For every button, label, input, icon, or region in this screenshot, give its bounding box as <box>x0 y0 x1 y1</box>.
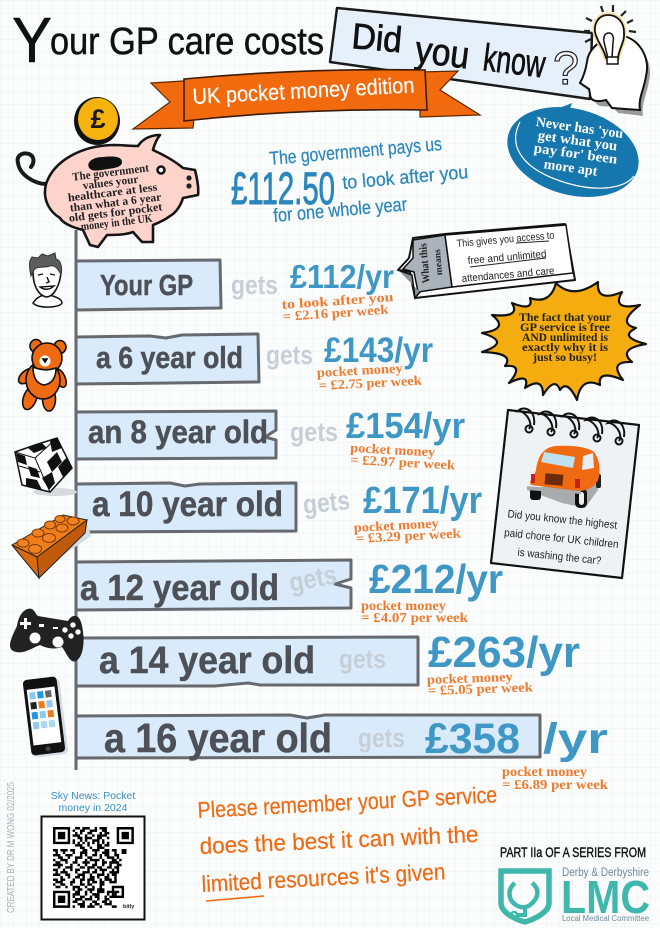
icon: pound coin: £ <box>90 104 106 134</box>
row: Your GP: = £2.16 per week <box>282 302 389 324</box>
row: a 14 year old: = £5.05 per week <box>428 679 534 698</box>
text: government pays us: £112.50 <box>231 163 335 214</box>
callout: starburst: GP service is free <box>520 320 611 334</box>
icon: piggy bank: values your <box>82 174 139 192</box>
row: an 8 year old: pocket money <box>350 440 436 459</box>
callout: starburst: just so busy! <box>532 350 597 364</box>
row: a 12 year old <box>76 556 503 625</box>
logo: Derby and Derbyshire LMC <box>501 867 650 923</box>
row: an 8 year old: = £2.97 per week <box>350 452 456 473</box>
row: a 6 year old: pocket money <box>316 361 403 380</box>
row: a 6 year old: gets <box>266 340 313 370</box>
panel: did you know banner: ? <box>553 42 579 94</box>
row: a 14 year old: a 14 year old <box>99 640 315 682</box>
callout: speech bubble: get what you <box>537 129 618 155</box>
row: a 14 year old: £263/yr <box>428 628 580 677</box>
row: a 14 year old: pocket money <box>427 669 513 687</box>
callout: what this means note: means <box>433 248 445 276</box>
banner: UK pocket money edition <box>133 70 480 129</box>
row: a 16 year old: = £6.89 per week <box>502 777 609 792</box>
row: a 12 year old: a 12 year old <box>80 567 279 608</box>
icon: head with light bulb <box>580 5 650 116</box>
callout: starburst: exactly why it is <box>522 340 608 354</box>
row: a 16 year old <box>76 715 609 792</box>
panel: did you know banner: Did <box>350 15 404 60</box>
callout: speech bubble <box>497 93 649 211</box>
panel: did you know banner: you <box>413 29 472 78</box>
row: a 16 year old: gets <box>358 723 405 753</box>
callout: what this means note: What this <box>417 242 433 284</box>
callout: what this means note: free and unlimited <box>467 248 547 267</box>
row: a 6 year old: a 6 year old <box>96 340 243 375</box>
text: closing message <box>197 781 498 901</box>
banner: UK pocket money edition: UK pocket money edition <box>192 72 415 109</box>
row: Your GP: gets <box>231 270 278 300</box>
title: Y <box>12 4 52 76</box>
panel: notepad with car: paid chore for UK children <box>504 527 619 551</box>
text: government pays us: to look after you <box>342 162 469 194</box>
panel: did you know banner: know <box>481 37 548 87</box>
row: an 8 year old <box>76 405 465 473</box>
QR caption: Sky News: Pocket <box>51 790 135 802</box>
callout: starburst <box>482 282 646 400</box>
QR caption: money in 2024 <box>59 802 128 814</box>
icon: piggy bank: old gets for pocket <box>68 201 163 225</box>
row: a 12 year old: gets <box>286 559 339 598</box>
icon: piggy bank: money in the UK <box>80 213 153 233</box>
row: a 10 year old: gets <box>301 485 351 520</box>
icon: pound coin <box>74 97 120 145</box>
callout: speech bubble: pay for' been <box>533 141 618 168</box>
logo: Derby and Derbyshire LMC: LMC <box>561 871 650 923</box>
icon: shield and stethoscope <box>501 871 549 922</box>
icon: lego brick <box>12 515 91 578</box>
callout: starburst: AND unlimited is <box>522 330 608 344</box>
row: Your GP: £112/yr <box>290 258 394 295</box>
row: a 16 year old: a 16 year old <box>104 715 332 761</box>
title: our GP care costs <box>50 21 324 63</box>
row: a 10 year old: pocket money <box>353 516 439 535</box>
panel: notepad with car <box>491 409 639 578</box>
icon: orange car <box>527 446 601 508</box>
row: an 8 year old: £154/yr <box>346 405 465 446</box>
icon: teddy bear <box>16 340 69 411</box>
icon: piggy bank <box>18 135 198 247</box>
row: a 6 year old: = £2.75 per week <box>318 373 423 393</box>
row: a 6 year old: £143/yr <box>324 331 433 370</box>
row: an 8 year old: an 8 year old <box>88 414 268 450</box>
text: government pays us <box>231 134 469 227</box>
logo: Derby and Derbyshire LMC: Derby & Derbyshire <box>562 867 649 879</box>
row: a 12 year old: pocket money <box>361 598 446 613</box>
icon: game controller <box>10 609 84 661</box>
row: a 10 year old <box>76 480 482 546</box>
text: closing message: Please remember your GP service <box>197 781 498 823</box>
logo: Derby and Derbyshire LMC: Local Medical Committee <box>562 914 650 923</box>
row: a 10 year old: a 10 year old <box>92 485 283 524</box>
row: a 16 year old: /yr <box>543 715 608 763</box>
callout: what this means note: This gives you access to <box>456 229 555 250</box>
callout: starburst: The fact that your <box>519 310 612 324</box>
panel: did you know banner <box>330 8 592 99</box>
row: a 16 year old: £358 <box>425 715 520 763</box>
panel: notepad with car: Did you know the highest <box>507 508 618 532</box>
row: a 16 year old: pocket money <box>502 764 587 779</box>
QR caption <box>51 790 135 814</box>
vertical axis <box>74 230 78 770</box>
callout: what this means note: attendances and care <box>461 265 555 285</box>
text: closing message: does the best it can with the <box>199 821 479 859</box>
row: an 8 year old: gets <box>290 417 338 447</box>
row: a 10 year old: £171/yr <box>363 480 482 522</box>
callout: speech bubble: more apt <box>543 157 599 180</box>
title <box>12 4 324 76</box>
row: a 10 year old: = £3.29 per week <box>355 525 462 546</box>
icon: piggy bank: healthcare at less <box>67 182 159 204</box>
row: a 14 year old <box>76 628 580 698</box>
row: a 6 year old <box>76 331 433 393</box>
row: Your GP <box>76 258 395 324</box>
row: a 12 year old: £212/yr <box>369 556 503 602</box>
row: Your GP: to look after you <box>281 289 395 312</box>
icon: piggy bank: The government <box>72 162 150 184</box>
row: a 12 year old: = £4.07 per week <box>361 610 469 625</box>
QR code: bitly <box>123 904 135 910</box>
icon: puzzle cube <box>15 438 77 496</box>
icon: piggy bank: than what a 6 year <box>69 191 162 215</box>
icon: GP face <box>29 253 62 307</box>
row: Your GP: Your GP <box>100 270 193 302</box>
panel: notepad with car: is washing the car? <box>517 547 602 567</box>
callout: speech bubble: Never has 'you <box>535 115 624 142</box>
text: closing message: limited resources it's given <box>201 858 446 897</box>
notepad rings <box>518 409 624 444</box>
icon: smartphone <box>22 676 69 758</box>
callout: what this means note <box>398 224 575 298</box>
QR code <box>42 816 144 920</box>
side credit: CREATED BY DR M WONG 02/2025 <box>5 782 17 913</box>
text: government pays us: for one whole year <box>273 194 408 227</box>
text: government pays us: The government pays us <box>269 134 443 170</box>
row: a 14 year old: gets <box>339 644 386 674</box>
